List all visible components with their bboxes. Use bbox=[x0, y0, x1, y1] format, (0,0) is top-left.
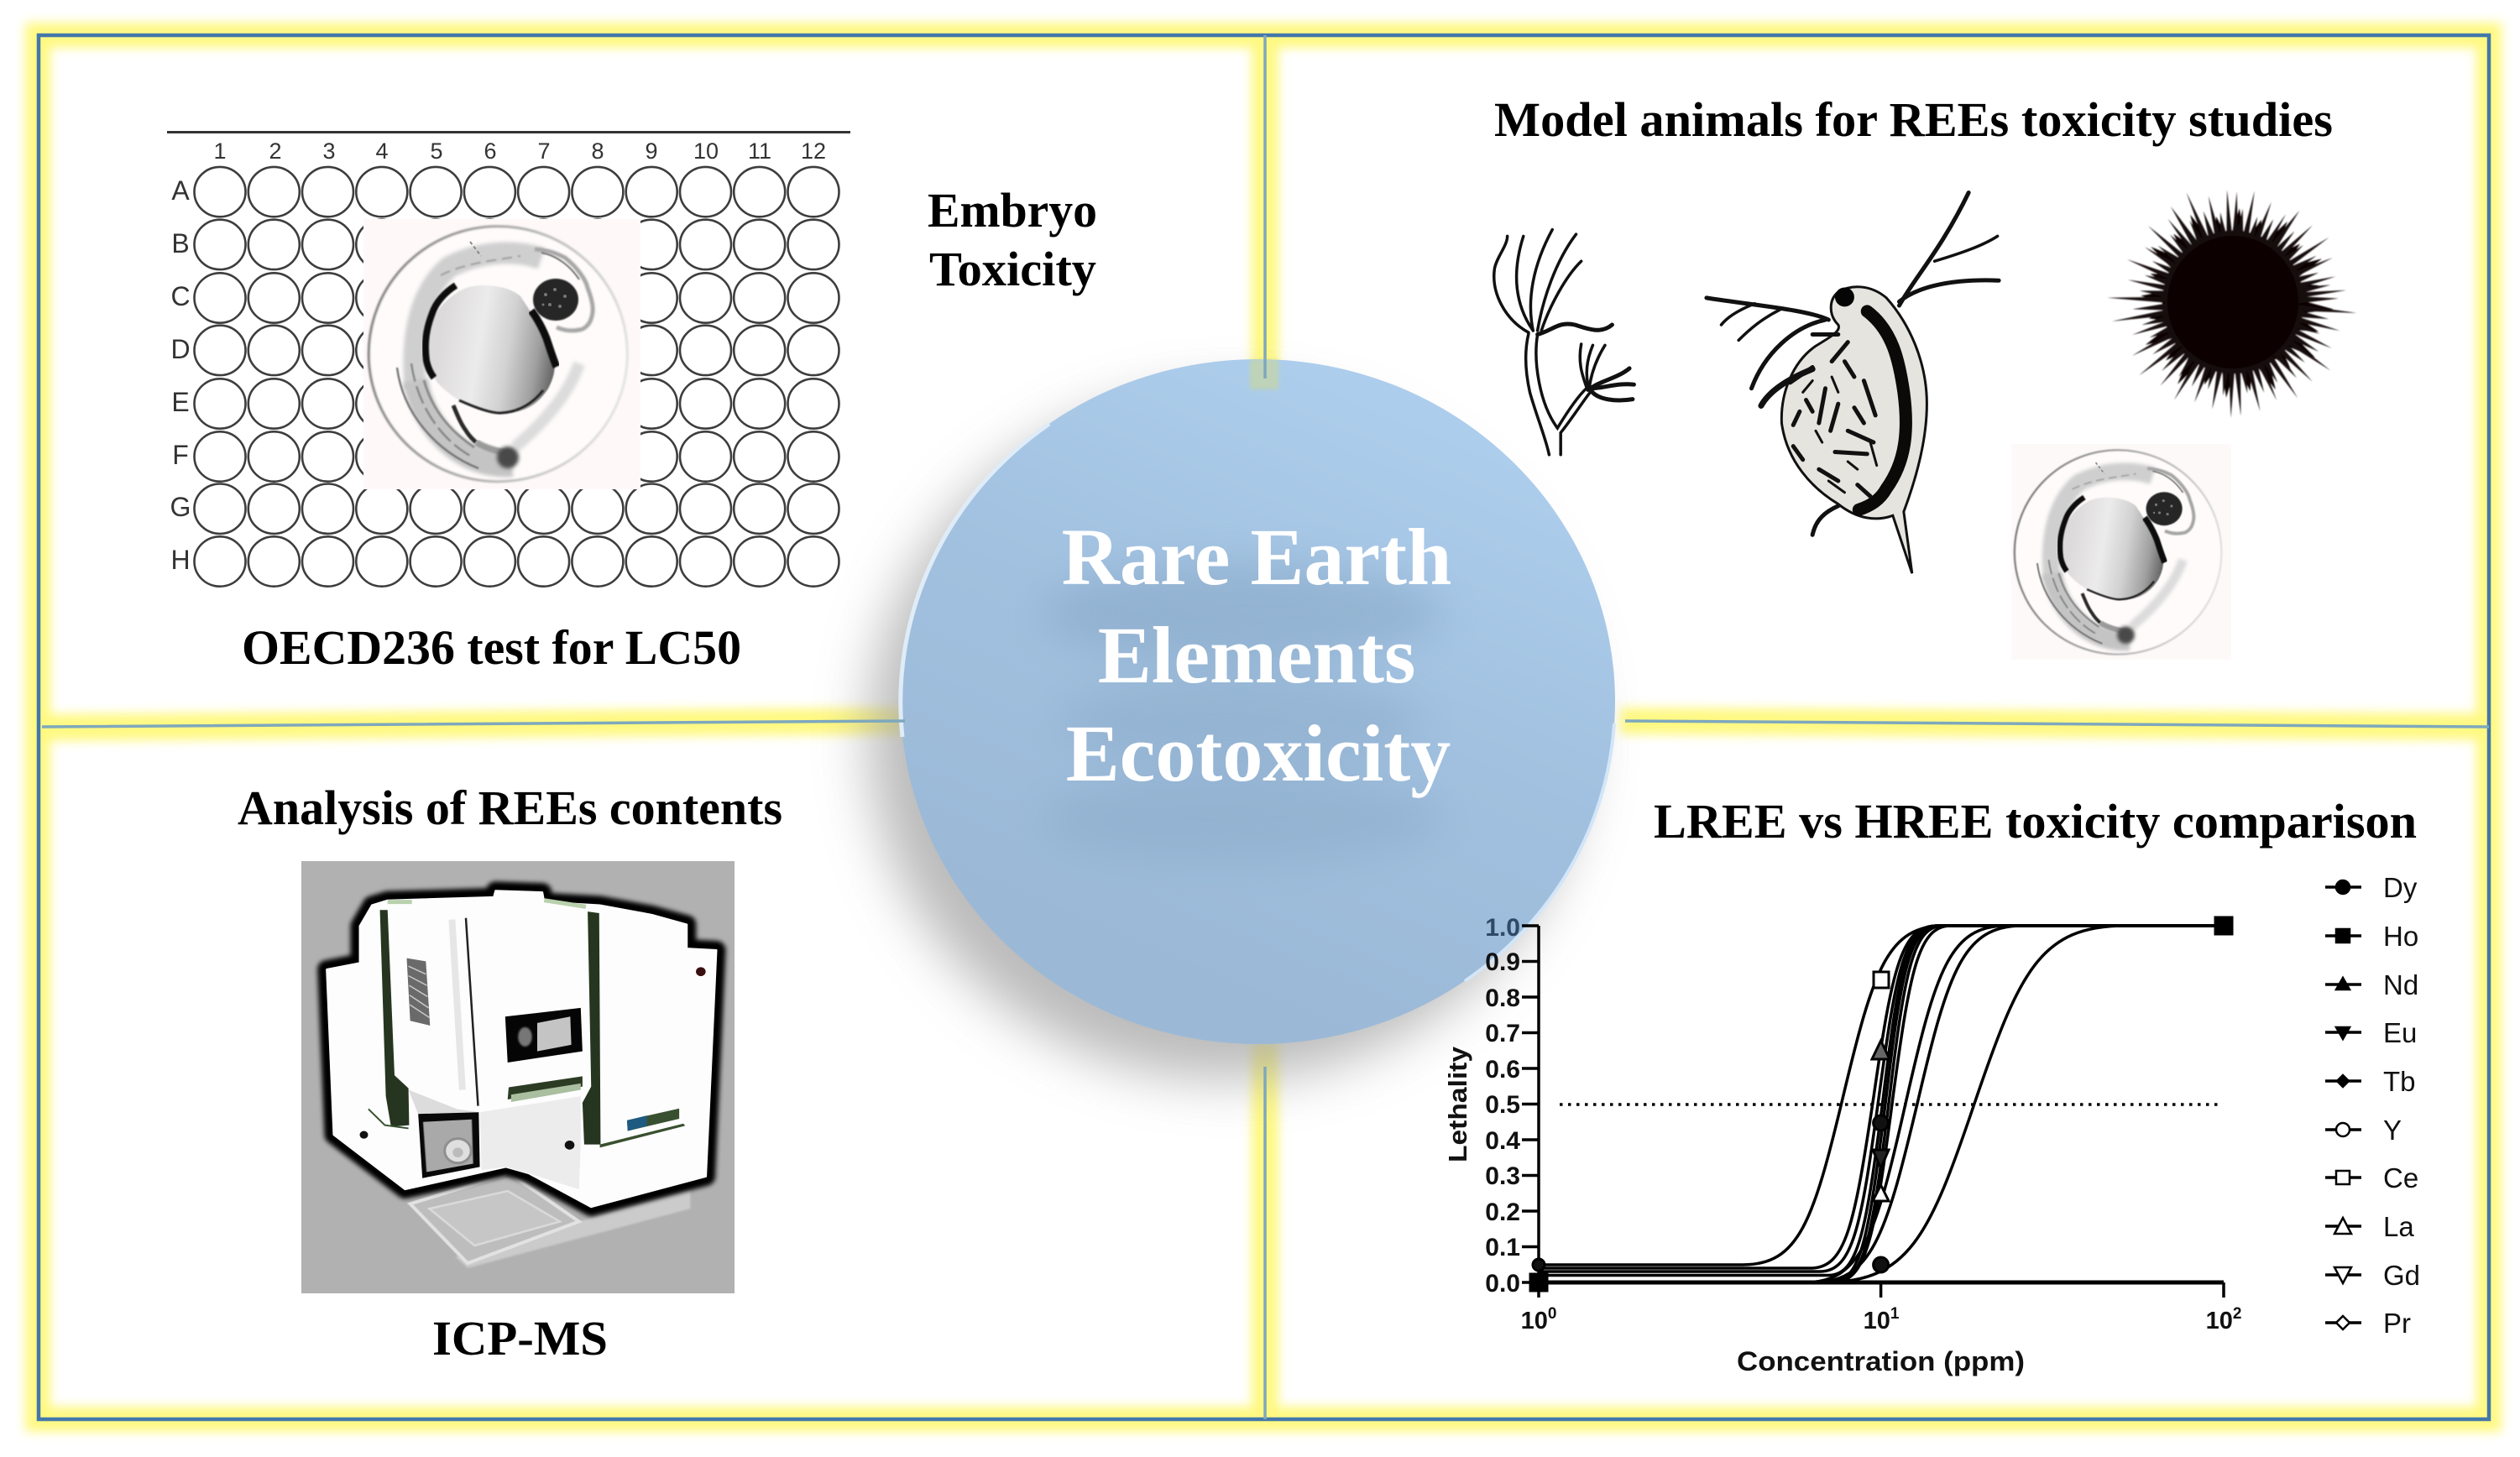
chart y axis: 0.4 bbox=[1485, 1127, 1520, 1155]
plate column numbers: 1 bbox=[213, 138, 227, 164]
chart x axis: 2 bbox=[2233, 1305, 2241, 1323]
dose response curves bbox=[1539, 926, 2224, 1282]
central circle bbox=[901, 359, 1615, 1044]
plate row letters: G bbox=[170, 492, 191, 522]
image: ICP-MS instrument bbox=[301, 861, 735, 1293]
chart legend: Ce bbox=[2383, 1162, 2418, 1193]
plate column numbers: 4 bbox=[375, 138, 389, 164]
chart legend: Y bbox=[2383, 1115, 2402, 1146]
chart y axis: 0.0 bbox=[1485, 1270, 1520, 1298]
plate row letters: C bbox=[170, 281, 191, 311]
plate column numbers: 11 bbox=[748, 138, 771, 164]
LC50 reference line bbox=[1560, 1103, 2218, 1106]
chart x axis: 1 bbox=[1890, 1305, 1900, 1323]
chart legend: Eu bbox=[2383, 1017, 2417, 1048]
chart y axis: 0.1 bbox=[1485, 1234, 1520, 1261]
chart x axis: 10 bbox=[1864, 1308, 1890, 1334]
chart legend: Nd bbox=[2383, 969, 2418, 1000]
chart y axis: 0.3 bbox=[1485, 1162, 1520, 1190]
chart x axis: 10 bbox=[2206, 1308, 2233, 1334]
chart x axis bbox=[1521, 1282, 2241, 1334]
instrument body bbox=[327, 890, 716, 1207]
chart y axis: 0.5 bbox=[1485, 1091, 1520, 1119]
plate column numbers: 9 bbox=[645, 138, 658, 164]
center title: Elements bbox=[1098, 610, 1415, 700]
plate row letters: A bbox=[171, 175, 190, 206]
heading: Analysis of REEs contents: Analysis of REEs contents bbox=[238, 781, 782, 835]
plate column numbers: 6 bbox=[484, 138, 497, 164]
icon: sea urchin bbox=[2107, 190, 2357, 418]
icon: zebrafish embryo in plate bbox=[363, 219, 640, 489]
plate column numbers: 3 bbox=[322, 138, 336, 164]
plate column numbers: 10 bbox=[693, 138, 719, 164]
chart legend: Pr bbox=[2383, 1308, 2411, 1339]
plate column numbers bbox=[213, 138, 826, 164]
plate column numbers: 2 bbox=[269, 138, 282, 164]
chart y axis: 0.7 bbox=[1485, 1020, 1520, 1047]
plate column numbers: 12 bbox=[801, 138, 826, 164]
plate row letters: E bbox=[171, 387, 190, 417]
center title bbox=[1062, 512, 1451, 798]
circle drop shadow bbox=[869, 394, 1582, 1079]
heading: Embryo Toxicity: Embryo bbox=[928, 183, 1097, 238]
chart x axis: 10 bbox=[1521, 1308, 1548, 1334]
plate column numbers: 5 bbox=[430, 138, 443, 164]
plate wells bbox=[195, 167, 839, 587]
plate column numbers: 7 bbox=[537, 138, 551, 164]
chart legend: Tb bbox=[2383, 1066, 2416, 1097]
chart y axis bbox=[1485, 914, 1539, 1298]
chart legend: Gd bbox=[2383, 1260, 2420, 1291]
heading: LREE vs HREE comparison: LREE vs HREE toxicity comparison bbox=[1654, 794, 2417, 849]
tray and base bbox=[410, 1173, 690, 1268]
plate row letters: B bbox=[171, 228, 190, 258]
plate row letters: F bbox=[172, 440, 189, 470]
heading: Embryo Toxicity: Toxicity bbox=[929, 242, 1096, 296]
heading: Embryo Toxicity bbox=[928, 183, 1097, 296]
yellow strip over circle top bbox=[1250, 359, 1278, 389]
chart legend: Dy bbox=[2383, 872, 2418, 903]
icon: zebrafish embryo small bbox=[2011, 444, 2231, 660]
chart legend: La bbox=[2383, 1211, 2414, 1242]
chart x title: Concentration (ppm) bbox=[1737, 1346, 2025, 1376]
chart legend bbox=[2325, 872, 2420, 1339]
plate row letters: D bbox=[170, 334, 191, 364]
icon: daphnia bbox=[1707, 192, 1999, 573]
heading: ICP-MS: ICP-MS bbox=[432, 1311, 608, 1366]
chart y axis: 0.9 bbox=[1485, 948, 1520, 976]
line chart: lethality vs concentration bbox=[1443, 914, 2241, 1376]
chart y axis: 1.0 bbox=[1485, 914, 1520, 942]
icon: hydra bbox=[1494, 230, 1634, 455]
center title: Rare Earth bbox=[1062, 512, 1451, 602]
plate column numbers: 8 bbox=[591, 138, 604, 164]
chart data markers bbox=[1530, 917, 2232, 1291]
heading: OECD236 test for LC50: OECD236 test for LC50 bbox=[242, 620, 741, 675]
plate row letters bbox=[170, 175, 191, 575]
chart x axis: 0 bbox=[1548, 1305, 1556, 1323]
chart legend: Ho bbox=[2383, 921, 2418, 952]
chart y title: Lethality bbox=[1443, 1046, 1472, 1162]
chart y axis: 0.6 bbox=[1485, 1056, 1520, 1084]
chart y axis: 0.8 bbox=[1485, 984, 1520, 1012]
plate: OECD236 well plate bbox=[167, 133, 850, 587]
vent bbox=[406, 958, 430, 1026]
center title: Ecotoxicity bbox=[1066, 708, 1451, 798]
plate row letters: H bbox=[170, 545, 191, 575]
chart y axis: 0.2 bbox=[1485, 1198, 1520, 1226]
pump bbox=[418, 1112, 480, 1178]
window bbox=[505, 1008, 583, 1063]
heading: Model animals: Model animals for REEs toxicity studies bbox=[1494, 92, 2333, 147]
